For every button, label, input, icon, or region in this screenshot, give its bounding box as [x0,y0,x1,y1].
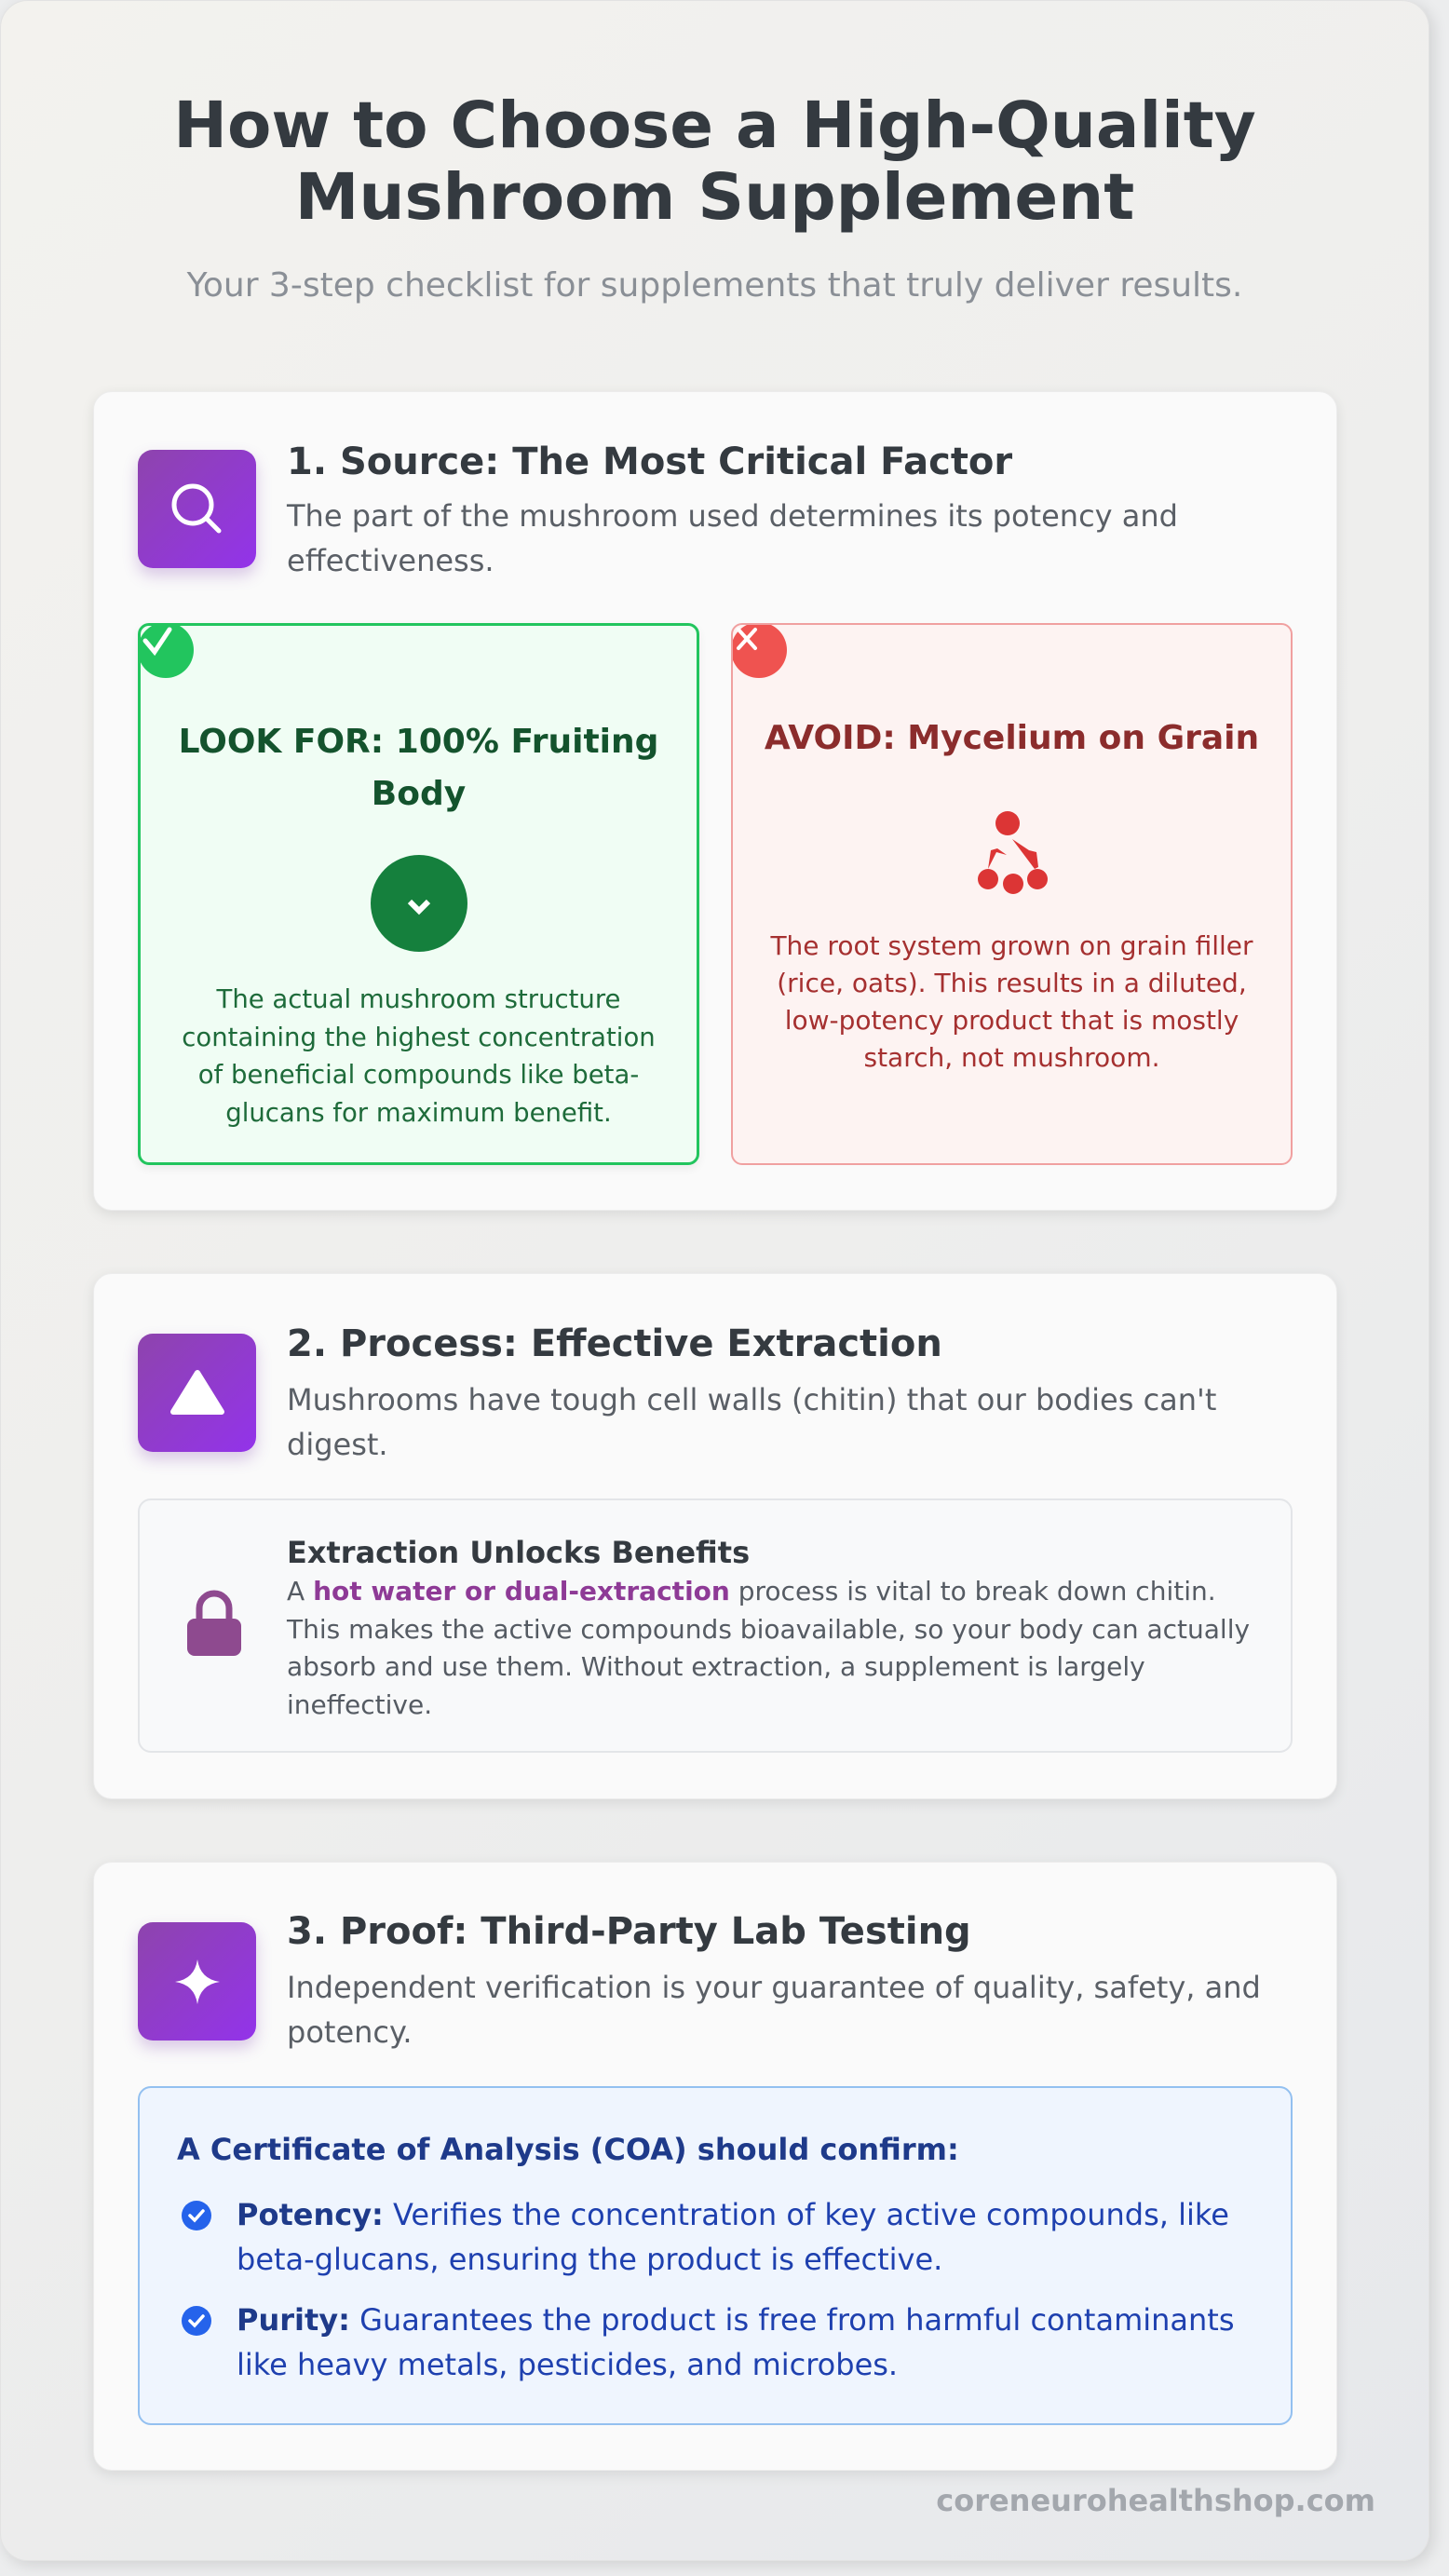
text: proof description: Independent verification is your guarantee of quality, safety, and potency. [287,1970,1261,2050]
text: avoid: The root system grown on grain filler (rice, oats). This results in a diluted, low-potency product that is mostly starch, not mushroom. [770,930,1253,1073]
heading: COA: A Certificate of Analysis (COA) should confirm: [177,2132,959,2167]
title: Mushroom Supplement [295,160,1134,235]
icon: check [182,2201,211,2230]
text: extraction: A hot water or dual-extraction process is vital to break down chitin. This makes the active compounds bioavailable, so your body can actually absorb and use them. Without extraction, a supplement is largely ineffective. [287,1576,1250,1719]
text: look for: The actual mushroom structure containing the highest concentration of beneficial compounds like beta-glucans for maximum benefit. [182,984,656,1127]
subtitle: Your 3-step checklist for supplements that truly deliver results. [187,266,1242,305]
text: process description: Mushrooms have tough cell walls (chitin) that our bodies can't digest. [287,1382,1216,1462]
heading: look for [179,723,658,813]
icon: check badge [138,622,194,678]
title [173,88,1256,235]
text: source description: The part of the mushroom used determines its potency and effectiveness. [287,498,1178,578]
icon: triangle [138,1334,256,1452]
icon: x badge [731,622,787,678]
heading: look for: LOOK FOR: 100% Fruiting [179,723,658,761]
heading: extraction: Extraction Unlocks Benefits [287,1535,750,1570]
panel: process [93,1273,1337,1799]
icon: lock [187,1591,241,1656]
callout: extraction [138,1498,1293,1753]
icon: sparkle [138,1922,256,2040]
panel: source [93,391,1337,1211]
heading: source: 1. Source: The Most Critical Factor [287,441,1012,483]
icon: mycelium network [978,811,1048,894]
icon: search [138,450,256,568]
callout: COA [138,2086,1293,2425]
heading: proof: 3. Proof: Third-Party Lab Testing [287,1910,971,1953]
icon: green circle [371,855,467,952]
heading: avoid: AVOID: Mycelium on Grain [765,719,1259,757]
heading: process: 2. Process: Effective Extraction [287,1322,942,1365]
panel: avoid [731,623,1293,1165]
footer: website: coreneurohealthshop.com [936,2483,1375,2518]
icon: check [182,2306,211,2336]
panel: look for [138,623,699,1165]
title: How to Choose a High-Quality [173,88,1256,163]
panel: proof [93,1862,1337,2471]
list item: purity: Purity: Guarantees the product is free from harmful contaminants like heavy metals, pesticides, and microbes. [237,2302,1235,2382]
list item: potency: Potency: Verifies the concentration of key active compounds, like beta-glucans, ensuring the product is effective. [237,2197,1229,2277]
heading: look for: Body [372,775,466,813]
